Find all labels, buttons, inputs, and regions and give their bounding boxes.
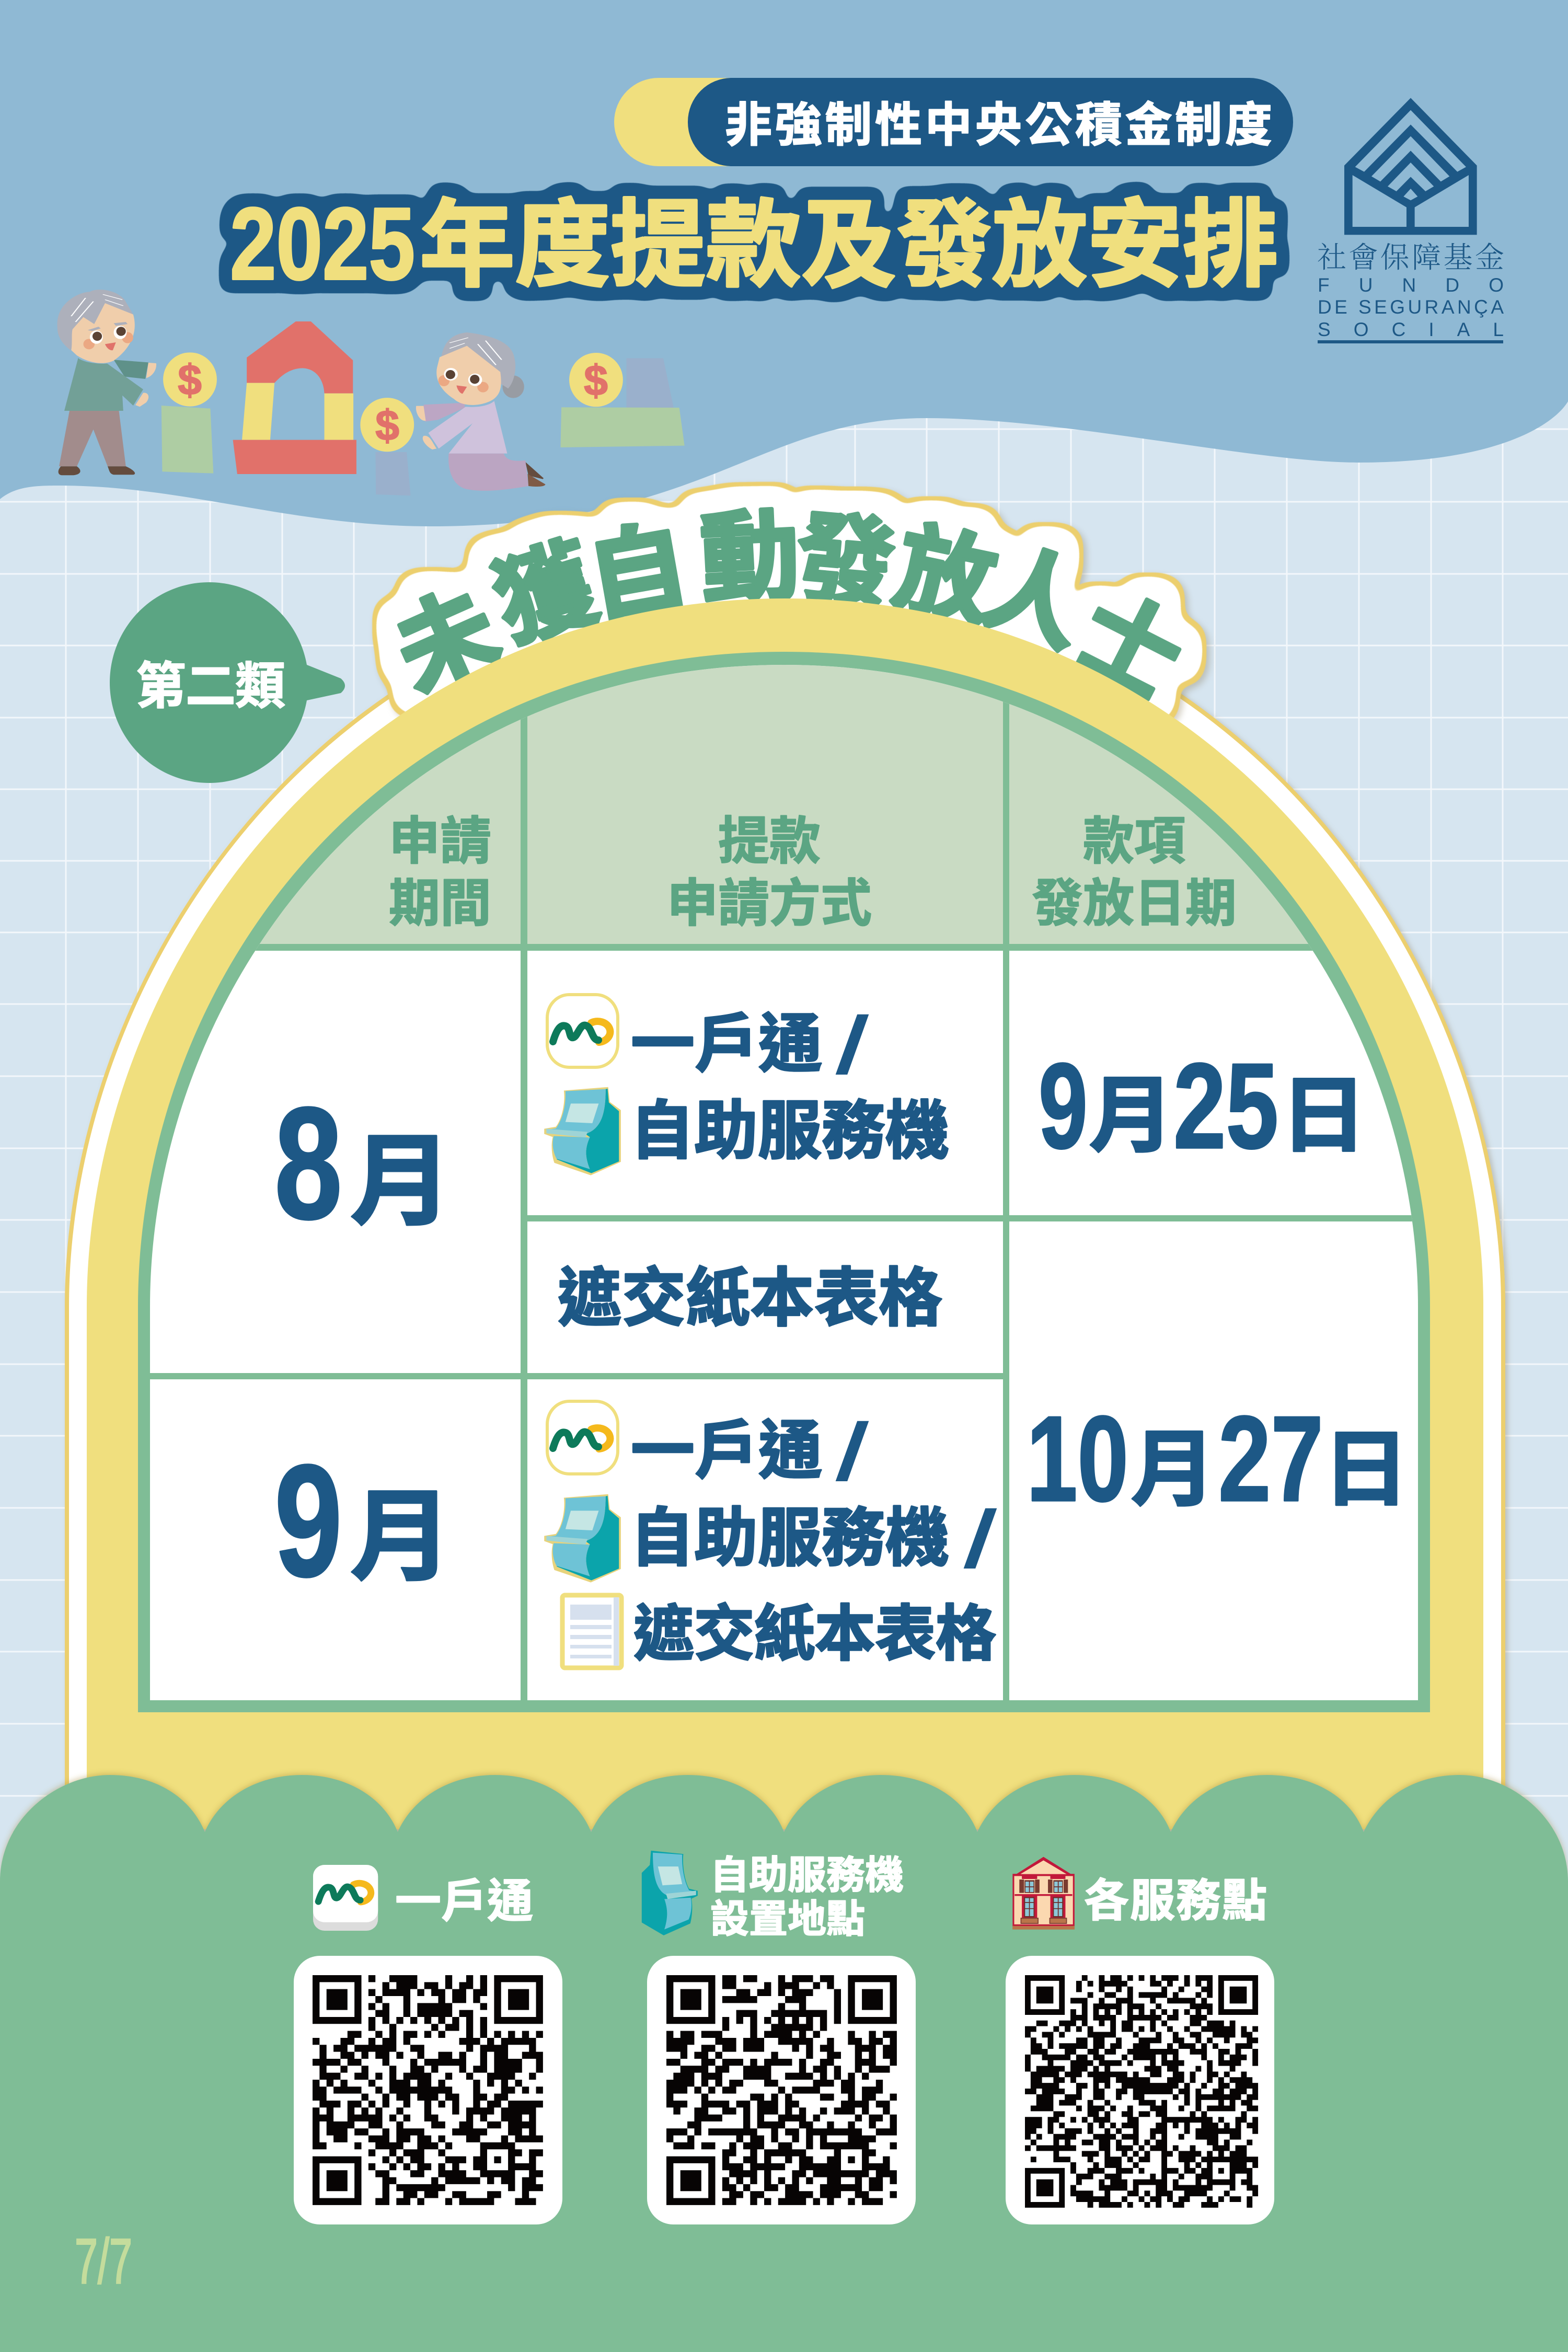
logo: Fundo de Segurança Social bbox=[1317, 98, 1504, 343]
curved banner heading: 士 bbox=[1060, 575, 1199, 719]
page number: 7/7 bbox=[75, 2226, 132, 2297]
coins bbox=[163, 352, 623, 452]
column header: method: 提款 bbox=[718, 812, 821, 870]
curved banner heading: 獲 bbox=[481, 527, 609, 662]
curved banner heading: 放 bbox=[885, 513, 1005, 641]
top blue wave panel bbox=[0, 0, 1568, 526]
method row 1 text bbox=[630, 1001, 949, 1167]
schedule table bbox=[150, 665, 1418, 1700]
coin dollar signs: $ bbox=[375, 402, 399, 449]
month: August: 8 bbox=[274, 1074, 342, 1252]
coin dollar signs: $ bbox=[584, 357, 608, 405]
curved banner heading: 發 bbox=[791, 503, 900, 622]
curved banner heading: 動 bbox=[698, 501, 802, 617]
green block left bbox=[162, 406, 213, 474]
blue block under coin bbox=[375, 452, 411, 495]
icon: building bbox=[1012, 1857, 1075, 1930]
month: September: 9 bbox=[274, 1432, 342, 1610]
curved banner heading bbox=[379, 501, 1199, 719]
column header: period: 期間 bbox=[389, 874, 491, 932]
date: 27 Oct: 27 bbox=[1218, 1391, 1323, 1527]
method row 3 text: 遮交紙本表格 bbox=[633, 1600, 996, 1668]
link label: service points: 各服務點 bbox=[1084, 1876, 1267, 1926]
table border arch bbox=[138, 652, 1430, 1712]
method row 3 text: 自助服務機 bbox=[630, 1503, 949, 1574]
column header: period: 申請 bbox=[389, 812, 491, 870]
month: August: 月 bbox=[350, 1125, 453, 1238]
pill text: 非強制性中央公積金制度 bbox=[725, 99, 1272, 152]
red house blocks bbox=[233, 321, 356, 474]
date: 25 Sep: 25 bbox=[1173, 1039, 1278, 1174]
coin dollar signs: $ bbox=[178, 356, 202, 404]
category badge bbox=[110, 582, 345, 783]
method row 3 text: / bbox=[838, 1408, 867, 1496]
month: September: 月 bbox=[350, 1481, 453, 1593]
link label: kiosk locations: 設置地點 bbox=[710, 1897, 865, 1941]
method row 1 text: / bbox=[838, 1001, 867, 1089]
column header: date bbox=[1032, 812, 1237, 932]
logo text: FUNDO bbox=[1318, 274, 1504, 296]
bottom green scalloped panel bbox=[0, 1775, 1568, 2352]
QR code: service points bbox=[1006, 1956, 1274, 2224]
month: September bbox=[274, 1432, 453, 1610]
programme pill bbox=[614, 78, 1293, 166]
icon: MO app row 3 bbox=[547, 1401, 618, 1474]
curved banner heading: 人 bbox=[970, 531, 1100, 667]
month: August bbox=[274, 1074, 453, 1252]
column header: method bbox=[667, 812, 872, 932]
date: 25 Sep: 9 bbox=[1039, 1039, 1088, 1174]
curved banner heading: 未 bbox=[379, 571, 515, 713]
date: 25 Sep: 月 bbox=[1089, 1069, 1174, 1162]
method row 3 text bbox=[630, 1408, 996, 1668]
link label: kiosk locations: 自助服務機 bbox=[710, 1853, 904, 1897]
QR code: MO app bbox=[294, 1956, 562, 2224]
date: 27 Oct: 月 bbox=[1131, 1423, 1216, 1516]
icon: MO app row 1 bbox=[547, 995, 618, 1067]
right blocks bbox=[560, 358, 685, 447]
logo text: DE SEGURANÇA bbox=[1318, 296, 1504, 318]
curved banner heading: 自 bbox=[580, 511, 697, 637]
icon: kiosk row 3 bbox=[544, 1494, 621, 1583]
illustration: elderly couple with blocks and coins bbox=[57, 290, 685, 495]
logo text bbox=[1317, 235, 1504, 343]
yellow arch bbox=[87, 598, 1483, 1829]
date: 27 Oct: 10 bbox=[1027, 1391, 1128, 1527]
icon: kiosk row 1 bbox=[544, 1087, 621, 1175]
method row 1 text: 一戶通 bbox=[631, 1009, 822, 1080]
date: 25 Sep: 日 bbox=[1281, 1069, 1367, 1162]
date: 25 Sep bbox=[1039, 1039, 1367, 1174]
badge text: 第二類 bbox=[136, 659, 285, 714]
link label: kiosk locations bbox=[642, 1851, 904, 1941]
main title: 年度提款及發放安排 bbox=[420, 192, 1278, 298]
column header: method: 申請方式 bbox=[667, 874, 872, 932]
coin dollar signs bbox=[178, 356, 608, 449]
man figure bbox=[57, 290, 156, 475]
method row 2 text: 遮交紙本表格 bbox=[558, 1263, 942, 1334]
logo text: 社會保障基金 bbox=[1317, 235, 1504, 276]
logo text: SOCIAL bbox=[1318, 319, 1504, 340]
link label: service points bbox=[1012, 1857, 1267, 1930]
method row 3 text: 一戶通 bbox=[631, 1415, 822, 1486]
method row 3 text: / bbox=[966, 1495, 995, 1583]
arch outer edge bbox=[65, 574, 1505, 1829]
link label: MO app: 一戶通 bbox=[395, 1875, 533, 1927]
woman figure bbox=[416, 332, 545, 491]
column header: date: 款項 bbox=[1083, 812, 1185, 870]
date: 27 Oct bbox=[1027, 1391, 1409, 1527]
icon: MO app small bbox=[313, 1865, 378, 1931]
icon: kiosk small bbox=[642, 1851, 698, 1935]
main title: 2025 bbox=[230, 187, 415, 301]
column header: period bbox=[389, 812, 491, 932]
icon: paper form bbox=[562, 1595, 621, 1668]
logo icon bbox=[1344, 98, 1477, 235]
column header: date: 發放日期 bbox=[1032, 874, 1237, 932]
method row 1 text: 自助服務機 bbox=[630, 1096, 949, 1167]
date: 27 Oct: 日 bbox=[1323, 1423, 1409, 1516]
link label: MO app bbox=[313, 1865, 533, 1931]
QR code: kiosk locations bbox=[647, 1956, 916, 2224]
